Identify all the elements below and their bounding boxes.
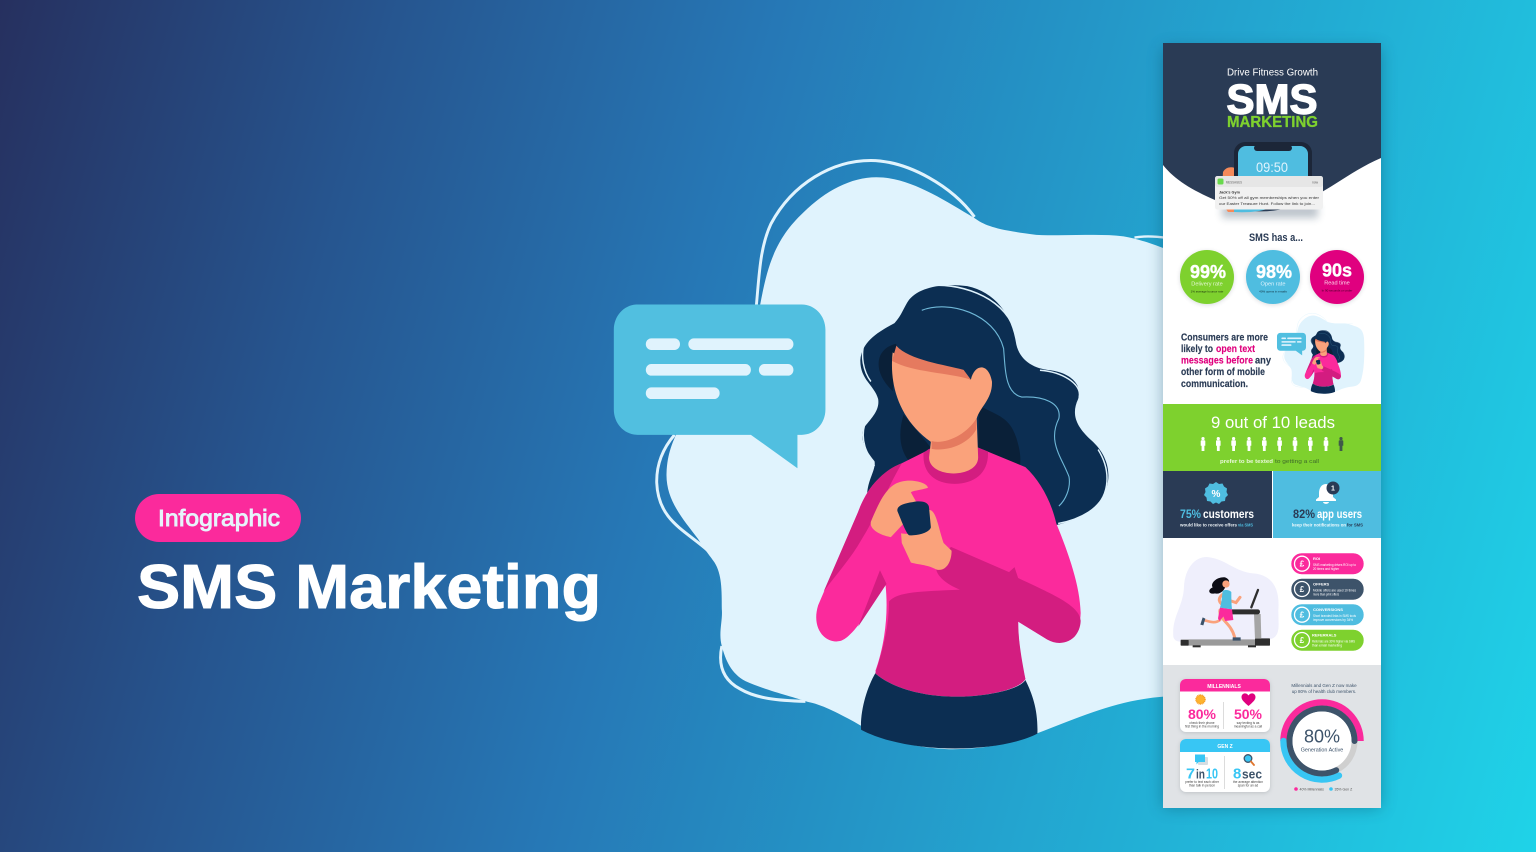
stat: 99% delivery rate: Delivery rate [1191,282,1223,288]
stat tile: 75% customers: customers [1203,509,1254,521]
stat: 99% delivery rate [1180,250,1234,305]
stat: 98% open rate: 98% [1256,262,1292,282]
benefit pill: Conversions: improve conversions by 34% [1313,618,1353,622]
benefit pill: Conversions [1291,604,1364,626]
background badge: Infographic [135,494,301,542]
card: Gen Z: than talk in person [1189,784,1215,788]
benefit pill: Conversions: £ [1300,610,1305,620]
benefit pill: Conversions: Short branded links in SMS tools [1313,614,1356,618]
caption: generation share: up 80% of health club members. [1292,689,1356,694]
benefit pill: Offers: more than print offers [1313,592,1339,596]
benefit pill: Conversions: CONVERSIONS [1313,607,1343,612]
bottom section background [1163,665,1381,808]
small illustration: woman with phone [1277,313,1364,394]
stat tile: 75% customers: 75% [1180,509,1201,521]
donut chart: 80% Generation Active: 80% [1304,726,1340,746]
stat: 90s read time: Read time [1324,280,1350,286]
donut legend: 40% Millennials [1300,787,1324,791]
stat: 98% open rate [1246,250,1300,305]
card: Gen Z [1180,739,1270,793]
card: Millennials: say texting is as [1237,721,1260,725]
phone with message notification: our Easter Treasure Hunt. Follow the link to join... [1219,202,1315,206]
stat: 99% delivery rate: 1% average bounce rate [1191,290,1224,294]
phone with message notification [1215,142,1323,218]
benefit pill: Offers: £ [1300,585,1305,594]
phone with message notification: Get 50% off all gym memberships when you enter [1219,196,1320,200]
green band: 9 out of 10 leads: prefer to be texted [1220,459,1273,465]
heading: SMS has a...: SMS has a... [1249,232,1303,244]
caption: generation share [1291,683,1357,694]
benefit pill: ROI: ROI [1313,556,1320,561]
infographic panel [1163,43,1381,808]
green band: 9 out of 10 leads: to getting a call [1275,459,1319,465]
illustration: woman with phone and speech bubble [614,161,1251,749]
stat tile: 75% customers [1163,471,1272,538]
card: Gen Z: 10 [1206,766,1218,782]
stat: 90s read time: In 90 seconds or under [1322,288,1352,292]
card: Millennials: 50% [1234,706,1263,722]
benefit pill: Offers [1291,578,1364,600]
stat tile: 75% customers: via SMS [1238,522,1253,528]
card: Gen Z: 7 [1186,766,1195,782]
card: Gen Z: prefer to text each other [1185,780,1220,784]
text block: consumers: Consumers are more [1181,332,1268,344]
header: dark curved background with title: SMS [1226,76,1318,122]
background badge: Infographic: Infographic [158,505,280,531]
green band: 9 out of 10 leads: 9 out of 10 leads [1211,413,1335,432]
header: dark curved background with title [1163,43,1381,211]
benefit pill: Offers: Mobile offers are used 10 times [1313,588,1356,592]
benefit pill: Referrals: £ [1300,636,1305,645]
card: Millennials [1180,679,1270,733]
card: Gen Z: in [1196,766,1205,782]
card: Gen Z: the average attention [1233,780,1263,784]
donut legend: 35% Gen Z [1334,787,1353,791]
card: Gen Z: 8 [1233,766,1241,782]
benefit pill: Referrals [1291,630,1364,651]
stat tile: 82% app users: app users [1317,509,1362,521]
stat: 90s read time [1310,250,1364,305]
green band: 9 out of 10 leads [1163,404,1381,471]
text block: consumers [1181,332,1271,390]
text block: consumers: any [1255,354,1271,366]
illustration: runner on treadmill [1173,557,1279,647]
header: dark curved background with title: Drive Fitness Growth [1227,66,1318,78]
text block: consumers: open text [1216,343,1255,355]
benefit pill: ROI: £ [1300,560,1305,568]
benefit pill: Offers: OFFERS [1313,582,1330,586]
benefit pill: ROI: 20 times and higher [1313,567,1340,571]
stat tile: 82% app users: 1 [1331,486,1335,492]
phone with message notification: now [1312,180,1319,184]
stat tile: 75% customers: % [1212,489,1221,500]
benefit pill: Referrals: Referrals are 30% higher via SMS [1312,640,1355,644]
card: Millennials: MILLENNIALS [1207,684,1241,690]
phone with message notification: 09:50 [1256,159,1288,175]
text block: consumers: messages before [1181,354,1253,366]
donut chart: 80% Generation Active: Generation Active [1301,748,1343,754]
panel shadow [1163,48,1381,808]
card: Gen Z: sec [1242,766,1262,782]
stat tile: 82% app users: for SMS [1347,522,1363,528]
card: Millennials: check their phone [1189,721,1215,725]
stat tile: 75% customers: would like to receive offers [1179,522,1238,528]
phone with message notification: Jack's Gym [1219,190,1241,194]
stat tile: 82% app users: keep their notifications on [1292,522,1346,528]
card: Gen Z: span for an ad [1238,784,1258,788]
benefit pill: Referrals: REFERRALS [1312,632,1337,638]
stat tile: 82% app users [1273,471,1381,538]
card: Gen Z: GEN Z [1217,744,1233,750]
benefit pill: ROI: SMS marketing drives ROI up to [1313,563,1356,567]
card: Millennials: 80% [1188,706,1217,722]
stat: 99% delivery rate: 99% [1190,262,1226,282]
header: dark curved background with title: MARKETING [1227,114,1318,131]
text block: consumers: other form of mobile [1181,366,1265,378]
stat: 98% open rate: Open rate [1261,282,1285,288]
stat tile: 82% app users: 82% [1293,509,1315,521]
card: Millennials: meaningful as a call [1234,724,1262,728]
stat: 90s read time: 90s [1322,260,1352,280]
main title: SMS Marketing [137,553,601,622]
card: Millennials: first thing in the morning [1185,724,1219,728]
phone with message notification: MESSAGES [1226,180,1242,184]
donut legend [1294,787,1353,791]
donut chart: 80% Generation Active [1284,702,1360,780]
text block: consumers: communication. [1181,378,1248,390]
caption: generation share: Millennials and Gen Z now make [1291,683,1357,688]
stat: 98% open rate: 40% opens in emails [1259,290,1287,294]
benefit pill: Referrals: than email marketing [1312,644,1342,648]
text block: consumers: likely to [1181,343,1213,355]
benefit pill: ROI [1291,553,1364,574]
